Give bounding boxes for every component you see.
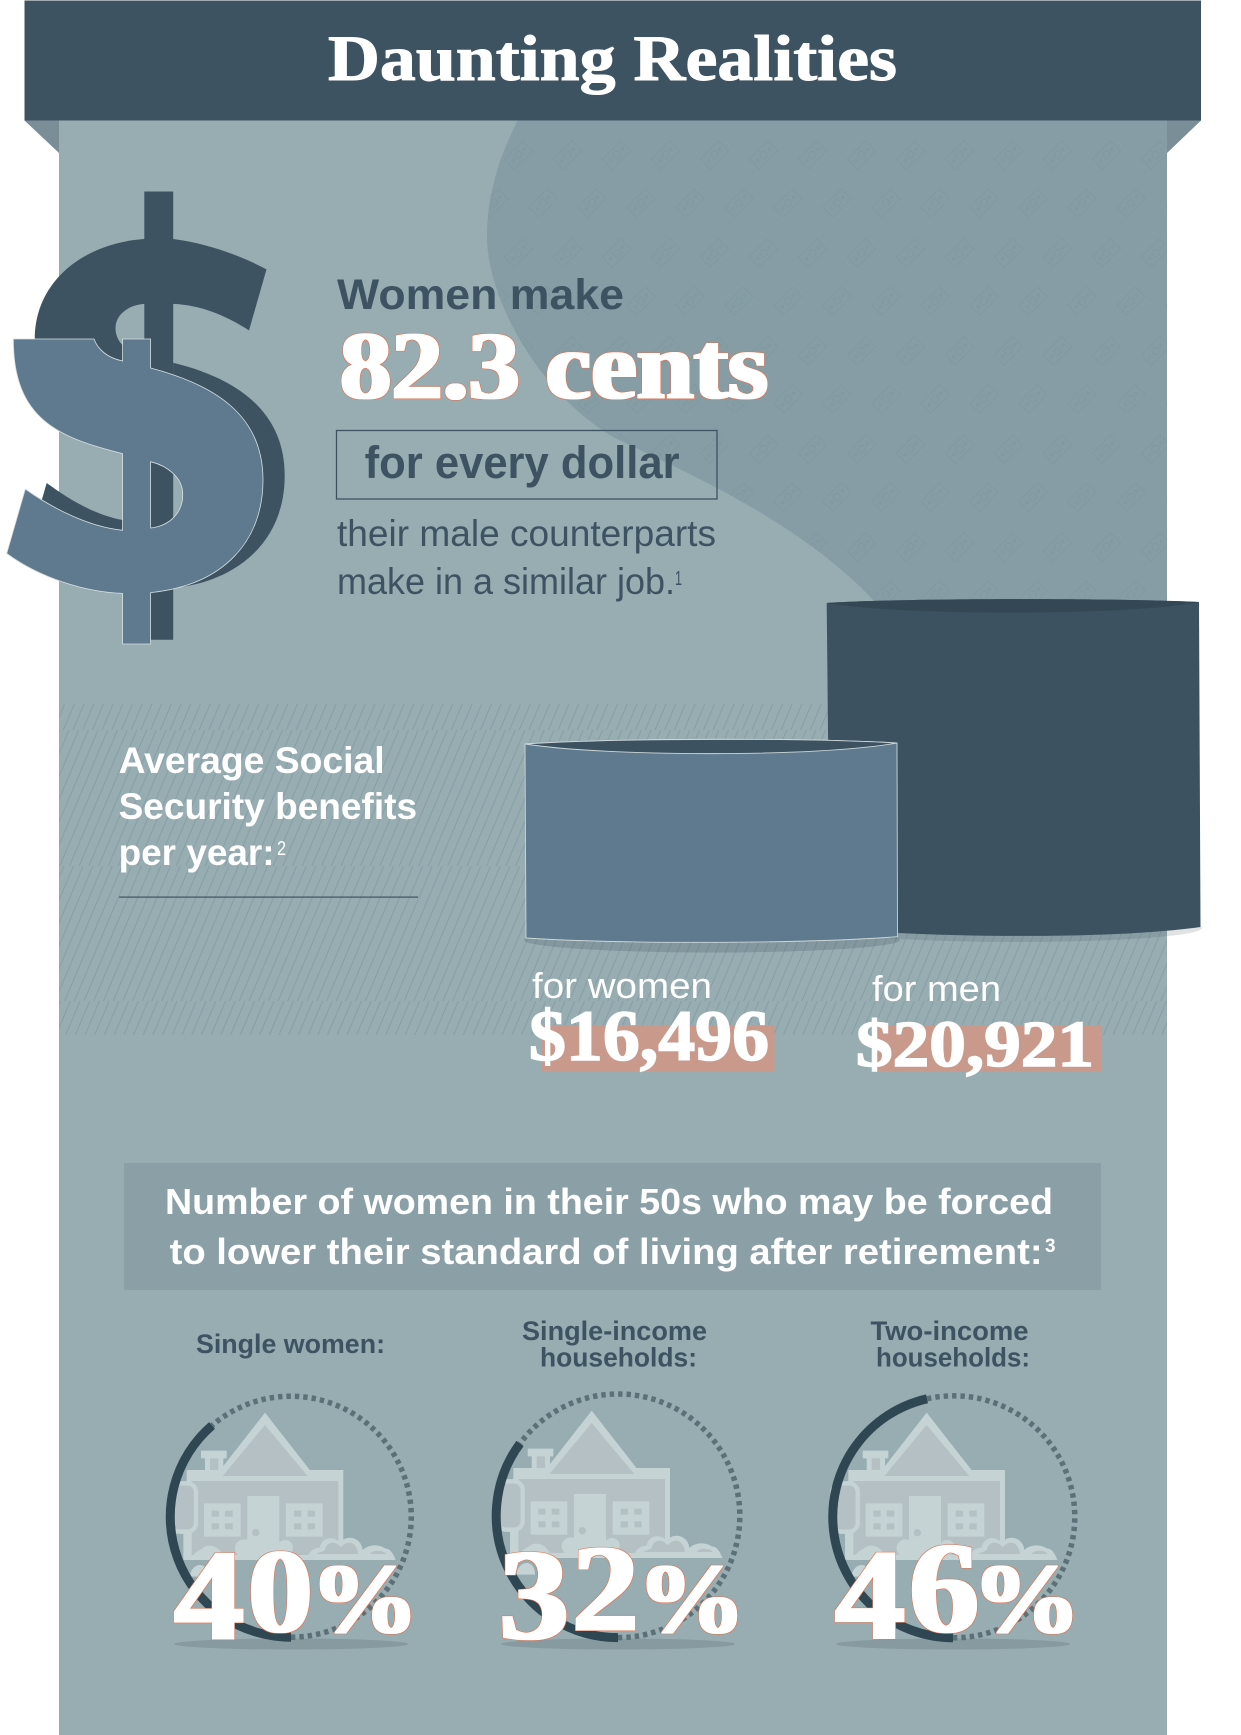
make in a similar job: make in a similar job.: [337, 561, 675, 602]
icon: house: [832, 1413, 1057, 1577]
label: households:: [540, 1343, 697, 1373]
progress ring: [833, 1396, 1075, 1638]
text block: average benefits heading: Security benefits: [119, 786, 417, 827]
chart: single-income households 32%: [496, 1316, 745, 1667]
value: %: [972, 1543, 1080, 1654]
value: 6: [909, 1516, 979, 1660]
chart: single women 40%: [170, 1329, 418, 1668]
value: 2: [572, 1520, 639, 1657]
progress ring: [496, 1394, 740, 1638]
label: Single-income: [522, 1316, 707, 1346]
back dollar sign: [35, 192, 285, 640]
value: %: [637, 1543, 745, 1654]
label: Single women:: [196, 1329, 385, 1359]
women value highlight: [542, 1025, 774, 1071]
their male counterparts: their male counterparts: [337, 513, 716, 554]
ground shadow: [174, 1638, 408, 1650]
text block: average benefits heading: per year:: [119, 832, 275, 873]
callout: standard of living: 3: [1045, 1236, 1056, 1257]
men bar shadow: [830, 914, 1202, 942]
value: %: [310, 1543, 418, 1654]
value: 4: [835, 1523, 905, 1667]
icon: house: [497, 1411, 722, 1575]
value: 0: [248, 1526, 313, 1658]
text block: average benefits heading: Average Social: [119, 740, 385, 781]
women bar shadow: [524, 928, 900, 952]
women value: $16,496: [529, 996, 769, 1076]
ground shadow: [836, 1638, 1070, 1650]
men label: for men: [872, 968, 1001, 1009]
bar chart: Social Security benefits: [524, 599, 1202, 1081]
progress ring: [170, 1396, 411, 1637]
label: Two-income: [870, 1316, 1028, 1346]
callout: standard of living: [124, 1163, 1101, 1290]
left fold of title banner: [24, 120, 59, 153]
label: [522, 1316, 707, 1373]
title: Daunting Realities: [328, 23, 897, 95]
men value: $20,921: [856, 1008, 1094, 1081]
hatched band behind benefits section: [59, 704, 1167, 1035]
value: 4: [174, 1524, 244, 1668]
women make: Women make: [337, 271, 624, 319]
ground shadow: [501, 1638, 735, 1650]
right fold of title banner: [1167, 120, 1201, 153]
women bar: [525, 739, 898, 942]
men value highlight: [874, 1025, 1102, 1071]
text block: pay gap: [336, 271, 768, 602]
82.3 cents: 82.3 cents: [340, 312, 768, 419]
men bar: [827, 599, 1200, 936]
value: 3: [499, 1523, 569, 1667]
text block: average benefits heading: [119, 740, 418, 898]
chart: two-income households 46%: [832, 1316, 1080, 1667]
label: [870, 1316, 1030, 1373]
text block: average benefits heading: 2: [277, 838, 286, 860]
icon: house: [171, 1413, 396, 1577]
outlined box: for every dollar: for every dollar: [365, 437, 680, 488]
decorative curved panel with money pattern: [487, 120, 1167, 604]
callout: standard of living: Number of women in their 50s who may be forced: [165, 1181, 1053, 1222]
callout: standard of living: to lower their standard of living after retirement:: [170, 1231, 1043, 1272]
outlined box: for every dollar: [336, 430, 717, 499]
women label: for women: [532, 965, 712, 1006]
label: households:: [876, 1343, 1030, 1373]
front dollar sign: [7, 339, 263, 644]
icon: dollar sign: [7, 192, 285, 644]
footnote 1: 1: [675, 568, 682, 590]
title banner: [24, 0, 1201, 120]
